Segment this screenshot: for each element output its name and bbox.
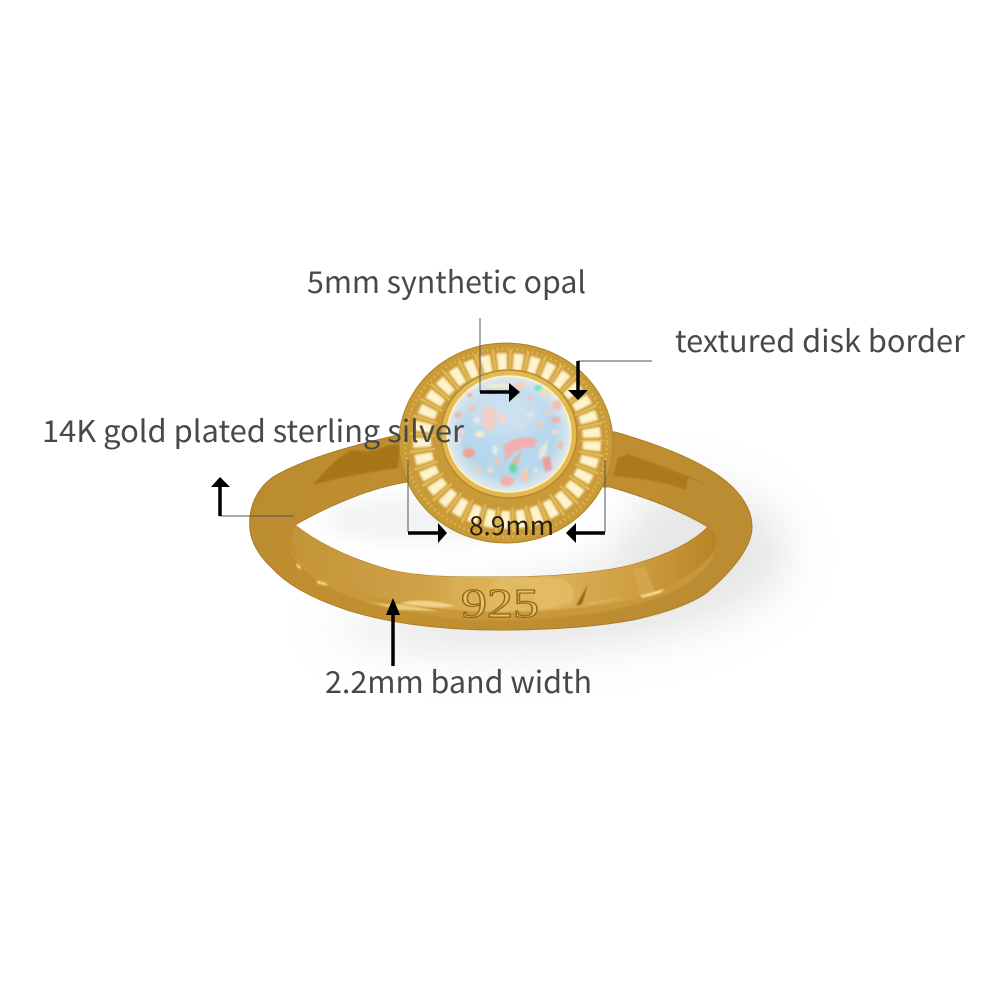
label: 5mm synthetic opal: 5mm synthetic opal: [307, 258, 586, 302]
925 stamp: 925: [461, 580, 539, 626]
arrow: gold plating: [211, 477, 294, 516]
left arm facet: [313, 444, 400, 485]
bezel: [441, 370, 577, 498]
label: 2.2mm band width: 2.2mm band width: [325, 658, 592, 702]
arrow: textured disk border: [568, 361, 652, 400]
ring illustration: [250, 343, 752, 630]
label: 8.9mm: 8.9mm: [469, 506, 554, 543]
band lower edge bevel: [290, 548, 716, 620]
ridge separators: [422, 362, 592, 520]
ring band: [250, 432, 752, 630]
arrow: band width: [386, 598, 400, 666]
pale cloud: [465, 388, 545, 432]
ring shadow: [320, 480, 790, 652]
arrow: disk width left: [408, 460, 447, 543]
label: textured disk border: textured disk border: [675, 317, 965, 361]
arrow: disk width right: [566, 460, 605, 543]
textured ridges: [422, 362, 592, 520]
opal speckles: [454, 382, 563, 486]
disk: [399, 343, 613, 543]
right arm facet: [613, 454, 713, 490]
disk rim beading: [405, 349, 607, 537]
arrow: synthetic opal: [480, 318, 520, 402]
opal stone: [447, 376, 571, 492]
band highlights: [296, 563, 665, 611]
label: 14K gold plated sterling silver: 14K gold plated sterling silver: [42, 407, 464, 451]
inner band surface: [292, 525, 716, 613]
